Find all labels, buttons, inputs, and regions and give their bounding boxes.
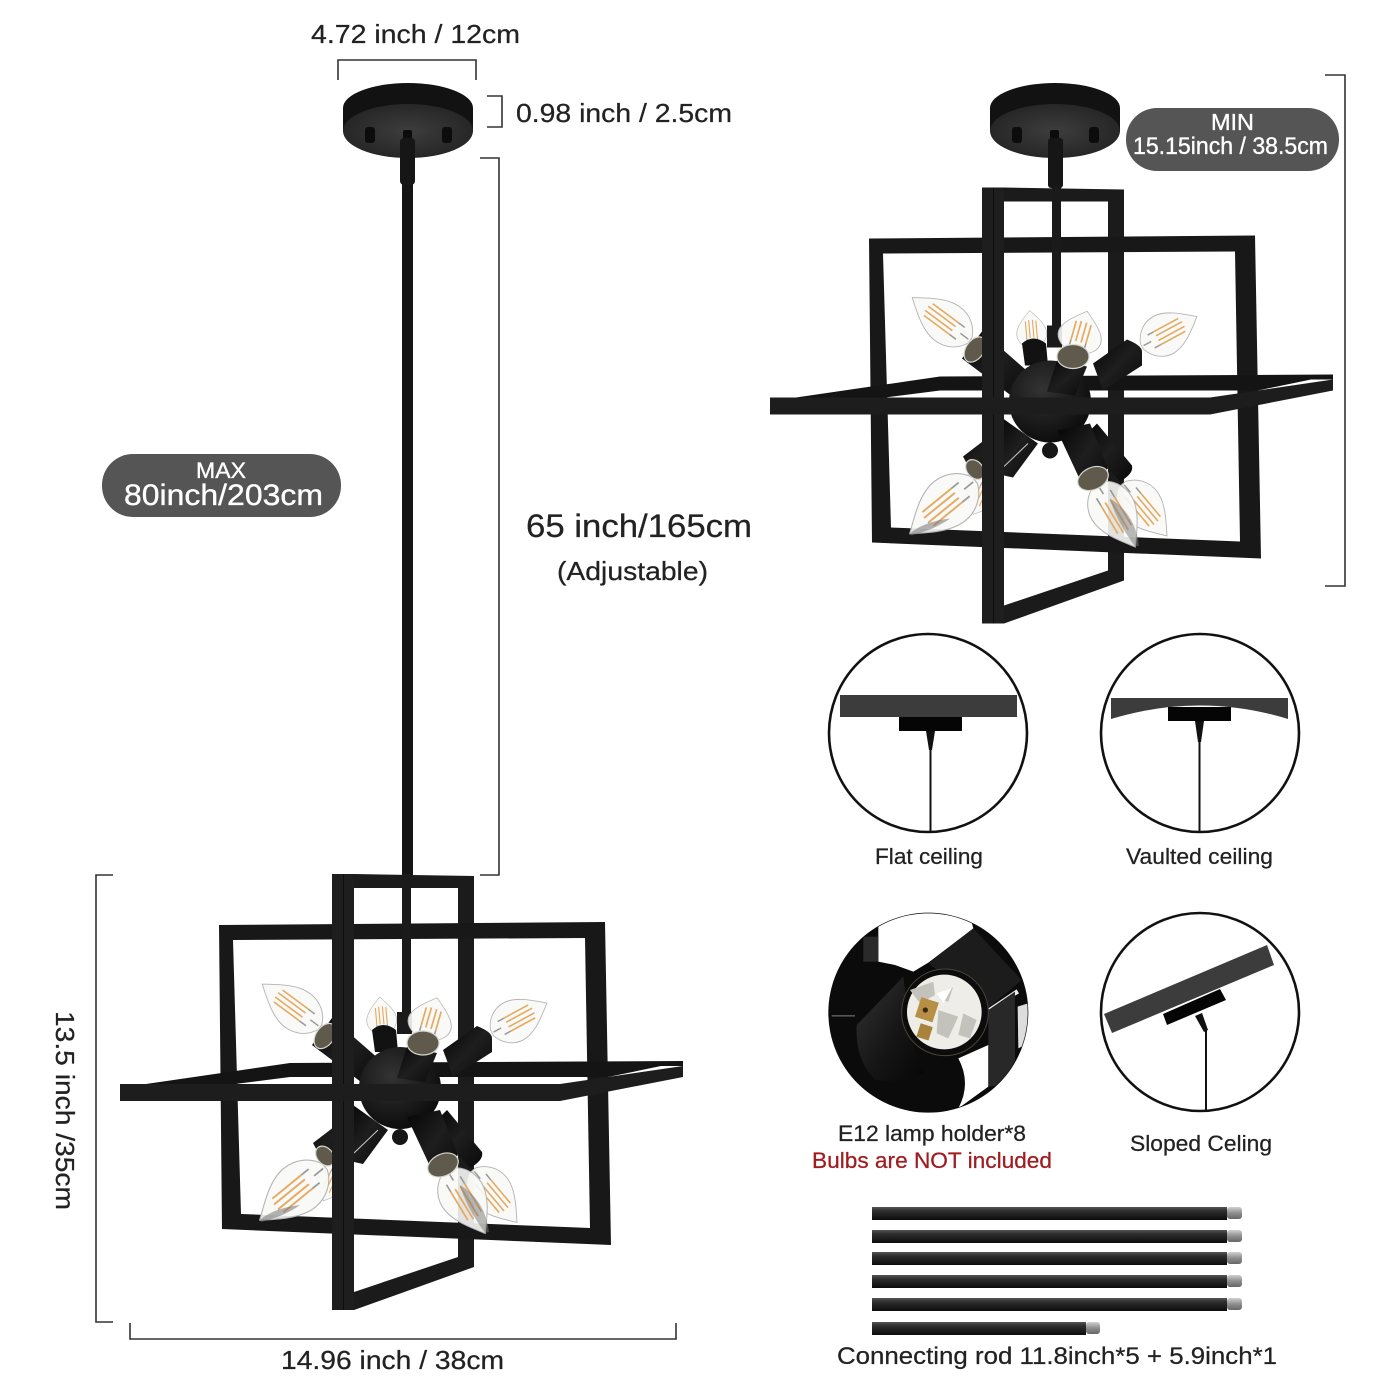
badge: maximum height: MAX xyxy=(196,458,246,483)
front part of horizontal frame xyxy=(120,1066,683,1101)
diagram: vaulted ceiling: Vaulted ceiling xyxy=(1126,844,1273,869)
rear part of horizontal frame xyxy=(146,1061,683,1084)
diagram: flat ceiling xyxy=(829,634,1027,869)
bulb collars xyxy=(310,1019,462,1182)
dimension: canopy height: 0.98 inch / 2.5cm xyxy=(516,98,732,128)
photo detail: E12 lamp holder: Bulbs are NOT included xyxy=(812,1148,1052,1173)
dimension: adjustable rod length: 65 inch/165cm xyxy=(526,508,752,544)
diagram: flat ceiling: Flat ceiling xyxy=(875,844,983,869)
dimension: adjustable rod length: (Adjustable) xyxy=(557,556,708,586)
stem inside frame xyxy=(397,874,412,1034)
dimension: adjustable rod length xyxy=(480,158,752,875)
dimension: lamp height: 13.5 inch /35cm xyxy=(50,1011,80,1210)
photo detail: E12 lamp holder: E12 lamp holder*8 xyxy=(838,1121,1026,1146)
dimension: minimum height bracket xyxy=(1325,75,1345,586)
badge: minimum height xyxy=(1126,108,1339,171)
front bulbs xyxy=(244,967,557,1245)
pendant lamp: frames and bulbs xyxy=(120,874,683,1310)
lamp sockets and hub xyxy=(312,1018,492,1177)
photo detail: E12 lamp holder xyxy=(812,910,1052,1173)
lamp: minimum height view xyxy=(770,83,1333,624)
badge: minimum height: 15.15inch / 38.5cm xyxy=(1133,133,1328,160)
rear bulbs xyxy=(309,996,533,1236)
canopy and long rod: max height view xyxy=(343,83,473,875)
square frame xyxy=(219,922,611,1245)
badge: maximum height xyxy=(102,454,341,517)
rear vertical frame xyxy=(354,874,474,1310)
dimension: lamp width xyxy=(130,1323,676,1375)
diagram: vaulted ceiling xyxy=(1101,634,1299,869)
front vertical post xyxy=(332,874,354,1310)
caption: connecting rods: Connecting rod 11.8inch*5 + 5.9inch*1 xyxy=(837,1343,1277,1370)
diagram: sloped ceiling: Sloped Celing xyxy=(1130,1131,1272,1156)
dimension: canopy width: 4.72 inch / 12cm xyxy=(311,19,520,49)
badge: maximum height: 80inch/203cm xyxy=(124,479,323,512)
dimension: lamp height xyxy=(50,875,113,1322)
dimension: canopy width xyxy=(311,19,520,80)
badge: minimum height: MIN xyxy=(1211,109,1254,135)
diagram: sloped ceiling xyxy=(1101,913,1299,1156)
dimension: lamp width: 14.96 inch / 38cm xyxy=(281,1345,504,1375)
connecting rods xyxy=(872,1207,1242,1335)
